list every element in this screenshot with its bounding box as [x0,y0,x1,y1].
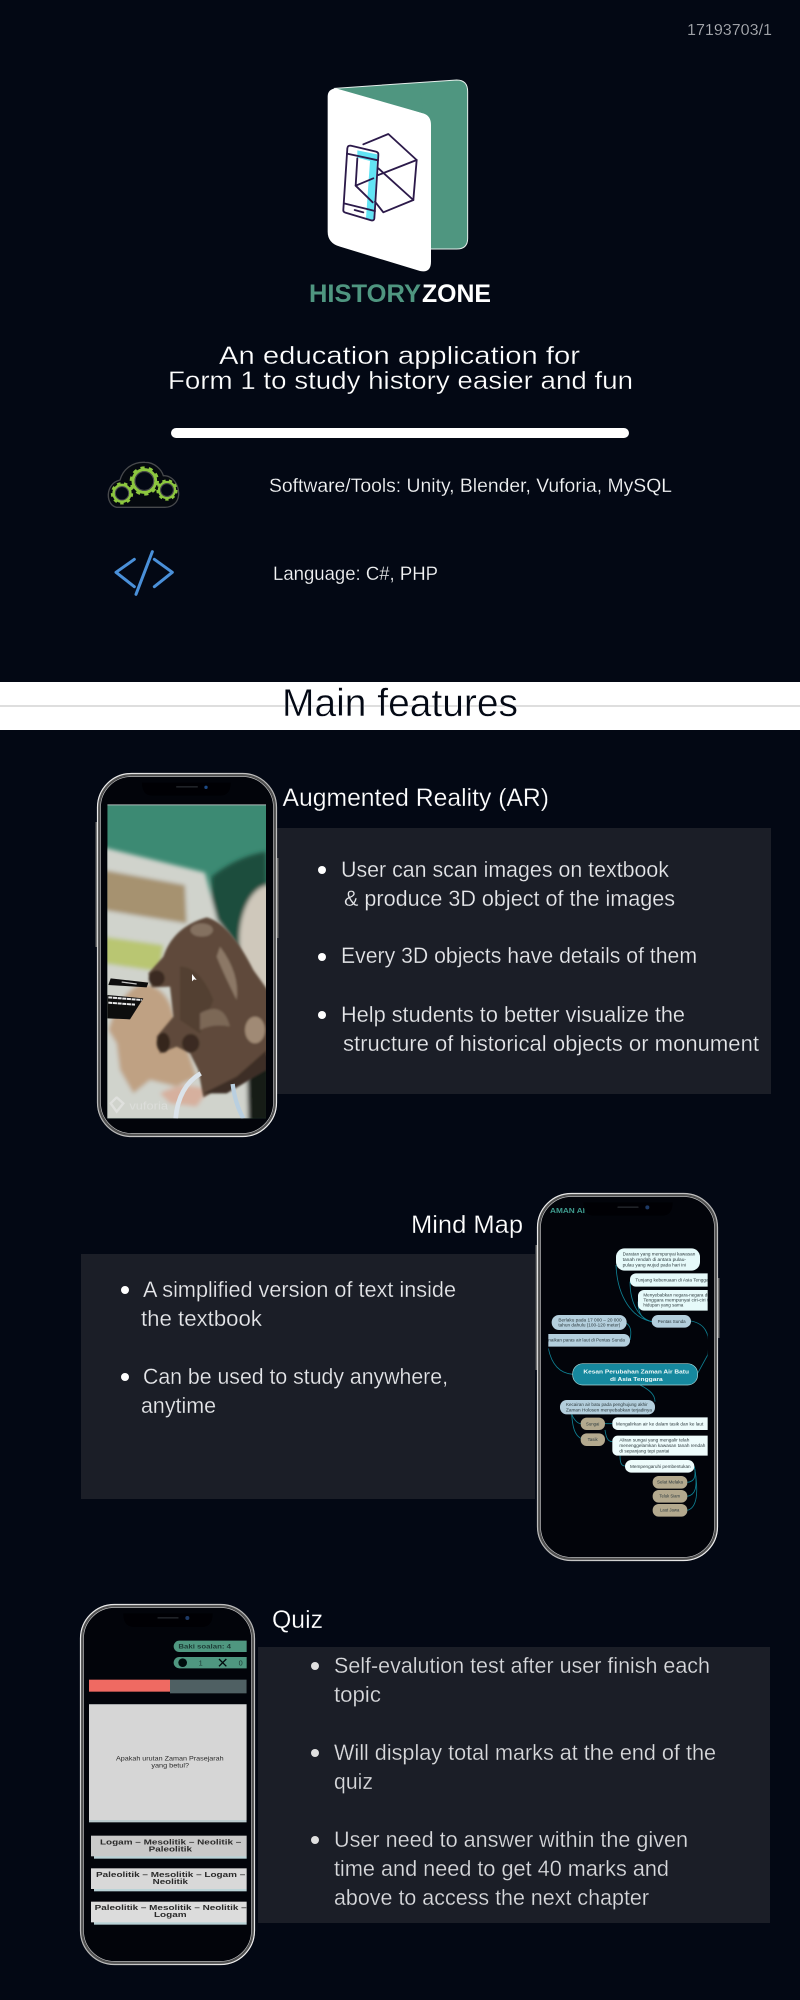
tagline: Form 1 to study history easier and fun [168,367,633,395]
mind map connectors [548,1265,709,1510]
answer option 3: Paleolitik – Mesolitik – Neolitik – [95,1905,247,1912]
node group: Pentas Sunda: pulau yang wujud pada hari ini [623,1262,686,1267]
answer option 2: Paleolitik – Mesolitik – Logam – [96,1872,245,1879]
icon: code brackets [116,552,172,594]
question card: yang betul? [151,1763,189,1770]
logo wordmark [309,280,491,308]
remaining questions pill [174,1640,247,1652]
software and tools text: Software/Tools: Unity, Blender, Vuforia, MySQL [269,475,672,497]
phone: AR screenshot [96,772,278,1138]
logo: HistoryZone [309,80,491,308]
node group: sea level: tahun dahulu (100-120 meter) [558,1323,621,1328]
phone: mind map screenshot [536,1194,725,1560]
node group: sea level: Berlaku pada 17 000 – 20 000 [558,1317,622,1322]
bullet list: mind map: A simplified version of text inside [143,1277,456,1302]
AR info labels [107,978,148,1019]
node group: Pentas Sunda: Tunjang kebenuaan di Asia Tengga [635,1278,709,1283]
answer option 3 [91,1902,251,1925]
question card [89,1704,247,1822]
bullet list: mind map: anytime [141,1393,216,1418]
vuforia watermark: vuforia [129,1100,168,1112]
cursor [192,974,197,981]
bullet list: mind map [121,1277,456,1418]
node group: rivers and lakes: di sepanjang tepi pantai [619,1448,669,1453]
phone notch [583,1202,673,1216]
screen title: AMAN AI [550,1206,585,1215]
phone notch [142,783,231,796]
heading: main features: Main features [282,682,518,725]
phone notch [123,1613,213,1627]
central node [573,1364,698,1385]
answer option 1 [91,1836,251,1859]
central node: di Asia Tenggara [610,1377,664,1383]
node group: Pentas Sunda: Daratan yang mempunyai kawasan [623,1252,696,1257]
bullet list: augmented reality: & produce 3D object of the images [344,886,675,911]
node group: rivers and lakes: Teluk Siam [659,1494,680,1499]
bullet list: quiz [311,1653,716,1910]
logo wordmark: HISTORY [309,280,421,308]
node group: rivers and lakes: menenggelamkan kawasan tanah rendah [619,1443,706,1448]
bullet list: augmented reality: Every 3D objects have details of them [341,943,697,968]
answer option 3: Logam [154,1912,187,1919]
node group: rivers and lakes: Kecairan air batu pada penghujung akhir [566,1402,648,1407]
bullet list: augmented reality: Help students to better visualize the [341,1002,685,1027]
answer option 1: Logam – Mesolitik – Neolitik – [100,1839,241,1846]
tagline: An education application for [219,342,580,370]
panel: augmented reality text [277,784,771,1094]
panel: quiz text [258,1606,770,1923]
bullet list: augmented reality: structure of historical objects or monument [343,1031,759,1056]
node group: Pentas Sunda: hidupan yang sama [643,1303,684,1308]
answer option 2: Neolitik [153,1879,188,1886]
main features band [0,682,800,730]
heading: quiz: Quiz [272,1606,323,1634]
node group: rivers and lakes: Laut Jawa [660,1508,680,1513]
node group: sea level: naikan paras air laut di Pentas Sunda [548,1338,626,1343]
question card: Apakah urutan Zaman Prasejarah [116,1756,224,1763]
bullet list: quiz: above to access the next chapter [334,1885,649,1910]
node group: Pentas Sunda: Menyebabkan negara-negara di [643,1293,708,1298]
icon: cloud gears [108,462,179,507]
bullet list: quiz: Will display total marks at the end of the [334,1740,716,1765]
tusks [176,1073,243,1118]
score pill: 0 [239,1658,243,1667]
node group: Pentas Sunda: tanah rendah di antara pulau- [623,1257,687,1262]
quiz screen [89,1613,260,1925]
node group: rivers and lakes: Mempengaruhi pembentukan [630,1464,691,1469]
timer bar [89,1680,247,1693]
heading: mind map: Mind Map [411,1211,523,1239]
logo wordmark: ZONE [422,280,491,308]
logo icon: open book [328,80,468,271]
bullet list: mind map: the textbook [141,1306,263,1331]
bullet list: quiz: User need to answer within the given [334,1827,688,1852]
bullet list: augmented reality: User can scan images on textbook [341,857,670,882]
node group: rivers and lakes [560,1400,722,1517]
language text: Language: C#, PHP [273,563,438,585]
remaining questions pill: Baki soalan: 4 [178,1643,232,1650]
bullet list: quiz: Self-evalution test after user finish each [334,1653,710,1678]
panel: mind map text [81,1211,535,1499]
node group: sea level [548,1315,630,1347]
score pill [174,1657,247,1668]
node group: rivers and lakes: Zaman Holosen menyebabkan terjadinya [566,1408,653,1413]
white divider bar [171,428,629,438]
tagline [168,342,633,395]
answer option 1: Paleolitik [149,1846,192,1853]
AR camera photo with 3D mammoth [107,786,266,1118]
answer option 2 [91,1868,251,1891]
node group: rivers and lakes: Selat Melaka [657,1480,684,1485]
central node: Kesan Perubahan Zaman Air Batu [583,1369,690,1375]
bullet list: quiz: topic [334,1682,381,1707]
bullet list: mind map: Can be used to study anywhere, [143,1364,448,1389]
bullet list: quiz: quiz [334,1769,373,1794]
node group: rivers and lakes: Tasik [588,1437,598,1442]
node group: Pentas Sunda [616,1248,708,1328]
node group: Pentas Sunda: Pentas Sunda [658,1319,686,1324]
vuforia watermark [111,1097,168,1112]
node group: Pentas Sunda: Tenggara mempunyai ciri-ciri t [643,1298,709,1303]
node group: rivers and lakes: Mengalirkan air ke dalam tasik dan ke laut [616,1421,704,1426]
student id: 17193703/1 [687,22,772,39]
score pill: 1 [199,1658,203,1667]
bullet list: quiz: time and need to get 40 marks and [334,1856,669,1881]
node group: rivers and lakes: Sungai [586,1421,599,1426]
mind map diagram [548,1205,708,1517]
bullet list: augmented reality [318,857,759,1056]
heading: augmented reality: Augmented Reality (AR) [282,784,549,812]
node group: rivers and lakes: Aliran sungai yang mengalir telah [619,1438,690,1443]
phone: quiz screenshot [80,1604,260,1964]
